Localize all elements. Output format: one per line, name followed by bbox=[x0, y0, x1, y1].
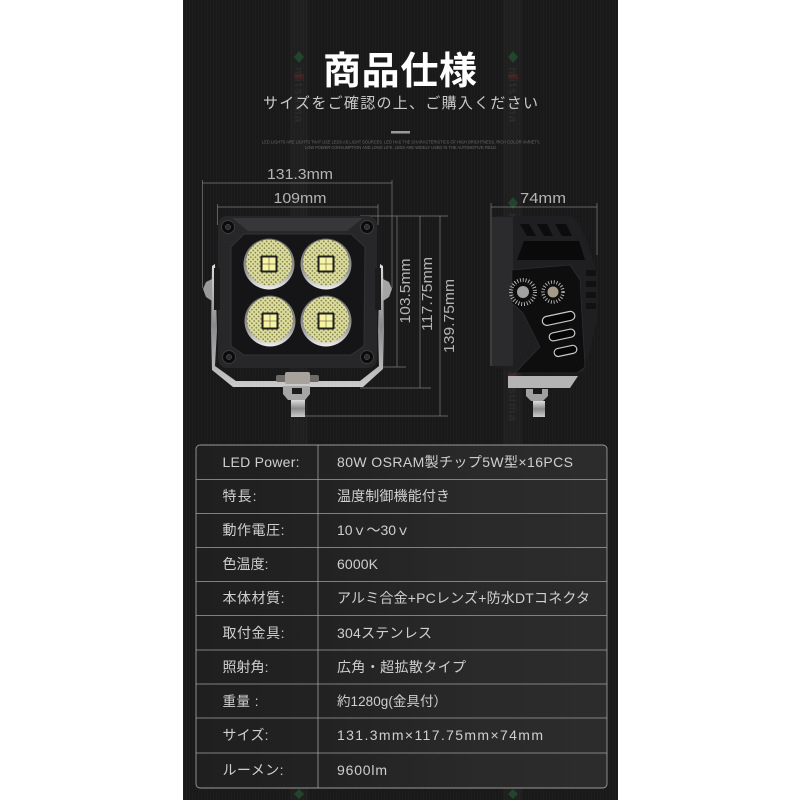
specification table bbox=[196, 445, 607, 788]
fine print description bbox=[262, 140, 540, 150]
subtitle: サイズをご確認の上、ご購入ください bbox=[263, 95, 538, 112]
title: 商品仕様 bbox=[323, 51, 477, 93]
row: body material: アルミ合金+PCレンズ+防水DTコネクタ bbox=[337, 590, 590, 606]
light housing bbox=[214, 216, 381, 368]
row: features bbox=[222, 488, 450, 504]
row: weight: 重量 : bbox=[222, 694, 258, 709]
row: weight: 約1280g(金具付） bbox=[337, 694, 447, 709]
row: size: 131.3mm×117.75mm×74mm bbox=[337, 727, 543, 743]
row: lumens: 9600lm bbox=[337, 762, 387, 778]
fine print description: LED LIGHTS ARE LIGHTS THAT USE LEDS AS LIGHT SOURCES. LED HAS THE CHARACTERISTICS OF HIGH BRIGHTNESS, RICH COLOR VARIETY, bbox=[262, 140, 540, 144]
dark background panel bbox=[183, 0, 618, 800]
mounting bracket bbox=[203, 264, 392, 387]
mounting bolt bbox=[276, 372, 319, 417]
side view dimension: 74mm bbox=[520, 191, 566, 207]
row: voltage: 10ｖ～30ｖ bbox=[337, 522, 410, 538]
row: mounting hardware: 取付金具: bbox=[222, 625, 284, 641]
row: color temperature: 色温度: bbox=[222, 556, 268, 572]
front view dimension labels: 131.3mm bbox=[267, 167, 333, 183]
table grid bbox=[196, 445, 607, 788]
row: features: 温度制御機能付き bbox=[337, 488, 450, 504]
row: size bbox=[222, 727, 543, 743]
row: body material: 本体材質: bbox=[222, 590, 284, 606]
front view dimension labels: 139.75mm bbox=[442, 279, 458, 353]
front view dimension labels: 109mm bbox=[274, 191, 326, 207]
bottom steel mount bbox=[508, 376, 578, 388]
row: LED power: LED Power: bbox=[222, 454, 300, 470]
accent bar bbox=[391, 131, 410, 134]
adjustment knobs bbox=[511, 280, 563, 304]
row: lumens: ルーメン: bbox=[222, 762, 284, 778]
front view dimension labels: 117.75mm bbox=[420, 257, 436, 331]
slots bbox=[542, 311, 578, 357]
fine print description: LOW POWER CONSUMPTION AND LONG LIFE. LEDS ARE WIDELY USED IN THE AUTOMOTIVE FIELD. bbox=[305, 145, 497, 150]
row: body material bbox=[222, 590, 590, 606]
row: mounting hardware: 304ステンレス bbox=[337, 625, 432, 641]
front view dimension lines bbox=[202, 180, 448, 416]
side bracket plate bbox=[512, 265, 585, 373]
side bolt bbox=[526, 389, 548, 417]
row: lumens bbox=[222, 762, 387, 778]
row: LED power bbox=[222, 454, 573, 470]
corner screws bbox=[222, 220, 374, 364]
row: size: サイズ: bbox=[222, 727, 268, 743]
side view dimension bbox=[491, 191, 597, 366]
row: voltage: 動作電圧: bbox=[222, 522, 284, 538]
side housing bbox=[492, 216, 597, 372]
row: features: 特長: bbox=[222, 488, 256, 504]
front view: work light bbox=[203, 216, 392, 417]
row: beam angle: 照射角: bbox=[222, 659, 268, 675]
row: beam angle bbox=[222, 659, 466, 675]
row: mounting hardware bbox=[222, 625, 432, 641]
cooling vents bbox=[517, 224, 596, 309]
row: beam angle: 広角・超拡散タイプ bbox=[337, 659, 466, 675]
row: voltage bbox=[222, 522, 410, 538]
row: color temperature bbox=[222, 556, 379, 572]
row: weight bbox=[222, 694, 447, 709]
side view: work light bbox=[492, 216, 597, 417]
LED lenses bbox=[244, 238, 352, 346]
front view dimension labels bbox=[267, 167, 458, 353]
front view dimension labels: 103.5mm bbox=[398, 258, 414, 324]
row: color temperature: 6000K bbox=[337, 556, 379, 572]
watermark columns bbox=[290, 0, 522, 800]
row: LED power: 80W OSRAM製チップ5W型×16PCS bbox=[337, 454, 573, 470]
